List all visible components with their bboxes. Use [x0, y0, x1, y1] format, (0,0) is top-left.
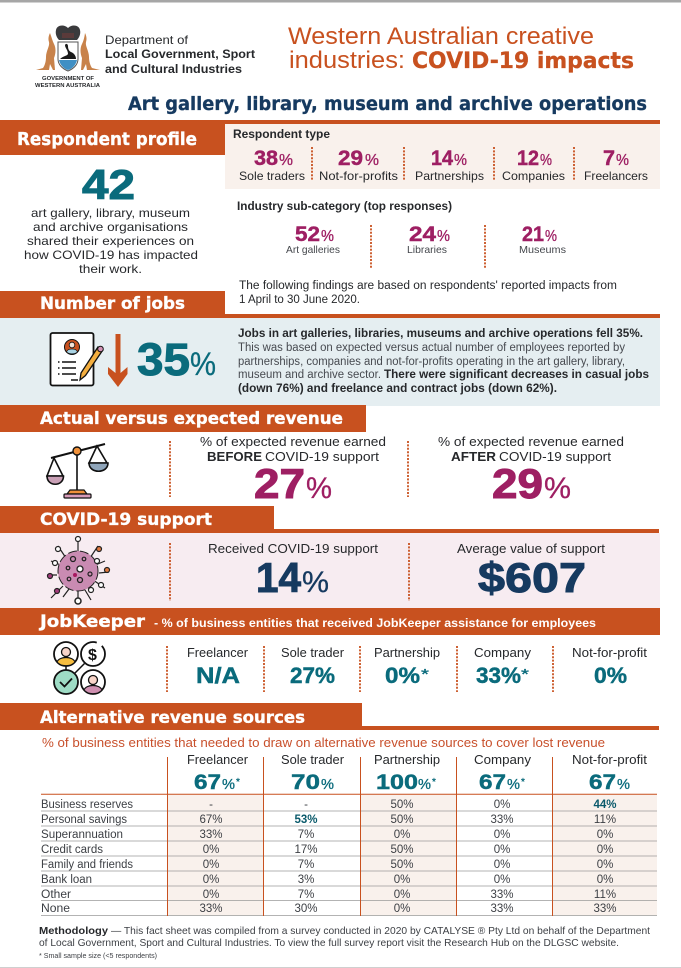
panel: JobKeeper percentages: Partnership — [374, 645, 440, 660]
department name: Local Government, Sport — [105, 47, 255, 61]
title: COVID-19 impacts — [412, 49, 634, 74]
row: other: 0% — [203, 889, 219, 901]
row: business reserves: Business reserves — [41, 799, 133, 811]
panel: revenue before support: 27 — [254, 460, 305, 507]
row: personal savings: 11% — [594, 814, 616, 826]
text block: jobs summary: This was based on expected versus actual number of employees reported by — [238, 342, 625, 354]
panel: revenue before support: COVID-19 support — [265, 449, 379, 464]
row: personal savings: Personal savings — [41, 814, 127, 826]
panel: JobKeeper percentages: Company — [474, 645, 532, 660]
row: family and friends: 7% — [298, 859, 314, 871]
statistic: average value — [409, 541, 605, 601]
table header: % — [321, 776, 334, 793]
panel: respondent type: 29 — [338, 147, 363, 170]
row: none — [41, 903, 617, 915]
table header — [187, 752, 647, 794]
statistic: received support: 14 — [256, 554, 302, 601]
row: none: 33% — [593, 903, 617, 915]
table: alternative revenue sources — [41, 752, 657, 916]
table caption: % of business entities that needed to draw on alternative revenue sources to cover lost revenue — [42, 735, 605, 750]
heading: JobKeeper — [0, 608, 660, 635]
panel: JobKeeper percentages: 0% — [594, 663, 627, 688]
heading: actual versus expected revenue — [0, 405, 366, 432]
table header: % — [507, 776, 520, 793]
panel: revenue before support: BEFORE — [207, 449, 262, 464]
callout: 42 organisations: shared their experiences on — [27, 234, 194, 248]
department name: and Cultural Industries — [105, 62, 242, 76]
table header: 70 — [291, 771, 320, 794]
heading: respondent profile: Respondent profile — [17, 129, 197, 150]
panel: revenue after support — [408, 434, 624, 507]
row: other: Other — [41, 889, 71, 901]
row: family and friends — [41, 859, 613, 871]
heading: JobKeeper: - % of business entities that received JobKeeper assistance for employees — [154, 616, 596, 630]
row: credit cards: Credit cards — [41, 844, 103, 856]
table header: * — [432, 777, 436, 788]
row: other — [41, 889, 616, 901]
panel: respondent type: 7 — [603, 147, 615, 170]
row: superannuation: Superannuation — [41, 829, 123, 841]
panel: respondent type: % — [279, 152, 293, 169]
panel: revenue before support — [170, 434, 386, 507]
row: business reserves — [41, 799, 617, 811]
panel: respondent type: % — [616, 152, 629, 169]
table header: 67 — [194, 771, 221, 794]
row: superannuation: 0% — [494, 829, 510, 841]
panel: industry sub-category: % — [437, 228, 450, 245]
row: superannuation: 7% — [298, 829, 314, 841]
table header: 100 — [376, 771, 418, 794]
panel: respondent type: Sole traders — [239, 169, 305, 183]
row: bank loan — [41, 874, 613, 886]
panel: respondent type: Partnerships — [415, 169, 484, 183]
panel: respondent type: Not-for-profits — [319, 169, 398, 183]
panel: revenue after support: % — [544, 472, 571, 505]
text block: findings period — [239, 280, 617, 306]
panel: industry sub-category: % — [545, 228, 557, 245]
table header: % — [617, 776, 630, 793]
row: bank loan: 0% — [597, 874, 613, 886]
methodology note: Methodology — [39, 925, 108, 937]
logo: Government of Western Australia crest: WESTERN AUSTRALIA — [35, 83, 100, 89]
panel: industry sub-category: 52 — [295, 223, 320, 246]
text block: findings period: The following findings are based on respondents' reported impacts from — [239, 280, 617, 292]
callout: 42 organisations: art gallery, library, museum — [31, 206, 190, 220]
row: personal savings: 67% — [199, 814, 223, 826]
row: none: 30% — [294, 903, 318, 915]
statistic: received support — [170, 541, 378, 601]
statistic: 35%: % — [190, 346, 216, 382]
row: superannuation — [41, 829, 613, 841]
row: bank loan: 0% — [494, 874, 510, 886]
row: bank loan: 0% — [203, 874, 219, 886]
row: bank loan: 0% — [394, 874, 410, 886]
statistic: average value: Average value of support — [457, 541, 605, 556]
row: personal savings: 53% — [294, 814, 318, 826]
row: family and friends: 50% — [390, 859, 414, 871]
panel: JobKeeper percentages: Sole trader — [281, 645, 345, 660]
row: personal savings: 33% — [490, 814, 514, 826]
callout: 42 organisations: how COVID-19 has impacted — [24, 248, 198, 262]
callout: 42 organisations: and archive organisations — [33, 220, 188, 234]
heading: alternative revenue sources — [0, 703, 659, 730]
heading: respondent profile — [0, 120, 660, 155]
panel: industry sub-category: Museums — [519, 244, 566, 256]
table header: Partnership — [374, 752, 440, 767]
text block: jobs summary: Jobs in art galleries, libraries, museums and archive operations fell 35%. — [238, 328, 643, 340]
heading: number of jobs — [0, 291, 660, 318]
table header: Freelancer — [187, 752, 249, 767]
panel: JobKeeper percentages: Not-for-profit — [572, 645, 647, 660]
icon: down arrow — [108, 334, 128, 387]
department name — [105, 33, 255, 76]
row: business reserves: 0% — [494, 799, 510, 811]
icon: document and pencil — [50, 333, 103, 386]
panel: JobKeeper percentages: 0% — [385, 663, 420, 688]
row: bank loan: 3% — [298, 874, 314, 886]
methodology note: of Local Government, Sport and Cultural Industries. To view the full survey report visit the Research Hub on the DLGSC website. — [39, 937, 619, 949]
logo: Government of Western Australia crest — [35, 26, 100, 89]
methodology note: — This fact sheet was compiled from a survey conducted in 2020 by CATALYSE ® Pty Ltd on behalf of the Department — [111, 925, 650, 937]
panel: JobKeeper percentages: 33% — [476, 663, 521, 688]
icon: people and money network — [54, 642, 105, 694]
panel: respondent type: % — [365, 152, 379, 169]
table header: Sole trader — [281, 752, 345, 767]
callout: 42 organisations — [24, 161, 198, 276]
table header: % — [418, 776, 431, 793]
statistic: 35%: 35 — [137, 334, 190, 385]
row: personal savings — [41, 814, 616, 826]
row: business reserves: - — [304, 799, 308, 811]
row: other: 11% — [594, 889, 616, 901]
icon: virus — [47, 536, 110, 604]
text block: jobs summary: museum and archive sector. — [238, 369, 381, 381]
statistic: 35% — [137, 334, 216, 385]
panel: number of jobs — [0, 318, 660, 406]
panel: respondent type: Respondent type — [233, 129, 330, 141]
statistic: received support: % — [302, 566, 329, 599]
row: credit cards — [41, 844, 613, 856]
row: family and friends: 0% — [203, 859, 219, 871]
title: Western Australian creative — [288, 23, 594, 50]
table header: Company — [474, 752, 532, 767]
text block: jobs summary: partnerships, companies and not-for-profits operating in the art gallery, library, — [238, 356, 625, 368]
panel: JobKeeper percentages: * — [521, 666, 529, 683]
callout: 42 organisations: their work. — [79, 262, 142, 276]
panel: respondent type: % — [540, 152, 552, 169]
row: credit cards: 50% — [390, 844, 414, 856]
row: none: 0% — [394, 903, 410, 915]
panel: respondent type — [225, 124, 660, 189]
heading: actual versus expected revenue: Actual versus expected revenue — [40, 409, 343, 429]
row: other: 7% — [298, 889, 314, 901]
row: bank loan: Bank loan — [41, 874, 92, 886]
panel: JobKeeper percentages: N/A — [196, 663, 240, 688]
row: superannuation: 33% — [199, 829, 223, 841]
title: industries: — [289, 47, 405, 74]
panel: JobKeeper percentages — [167, 645, 647, 692]
row: family and friends: 0% — [494, 859, 510, 871]
panel: industry sub-category: Industry sub-category (top responses) — [237, 201, 452, 213]
panel: industry sub-category: % — [321, 228, 334, 245]
row: none: 33% — [199, 903, 223, 915]
panel: respondent type: Companies — [502, 169, 565, 183]
icon: scales — [47, 444, 108, 498]
panel: industry sub-category: 21 — [522, 223, 544, 246]
icon: people and money network: $ — [88, 647, 97, 664]
panel: revenue before support: % — [306, 472, 332, 505]
department name: Department of — [105, 33, 189, 47]
table header: Not-for-profit — [572, 752, 647, 767]
panel: respondent type: Freelancers — [584, 169, 648, 183]
heading: number of jobs: Number of jobs — [40, 294, 185, 314]
row: credit cards: 17% — [294, 844, 318, 856]
table header: * — [236, 777, 240, 788]
row: business reserves: 50% — [390, 799, 414, 811]
heading: alternative revenue sources: Alternative revenue sources — [40, 708, 305, 728]
text block: findings period: 1 April to 30 June 2020. — [239, 294, 360, 306]
row: credit cards: 0% — [494, 844, 510, 856]
row: superannuation: 0% — [597, 829, 613, 841]
panel: industry sub-category: Art galleries — [286, 244, 340, 256]
row: business reserves: 44% — [593, 799, 617, 811]
row: family and friends: Family and friends — [41, 859, 133, 871]
statistic: average value: $607 — [478, 554, 586, 601]
table header: % — [222, 776, 235, 793]
table header: 67 — [479, 771, 506, 794]
text block: jobs summary — [238, 328, 649, 395]
row: other: 0% — [394, 889, 410, 901]
panel: JobKeeper percentages: Freelancer — [187, 645, 249, 660]
heading: COVID-19 support — [0, 506, 659, 533]
statistic: received support: Received COVID-19 support — [208, 541, 378, 556]
panel: industry sub-category: 24 — [409, 223, 436, 246]
logo: Government of Western Australia crest: GOVERNMENT OF — [42, 76, 95, 82]
text block: jobs summary: (down 76%) and freelance and contract jobs (down 62%). — [238, 383, 557, 395]
panel: respondent type: 12 — [517, 147, 539, 170]
panel: revenue after support: COVID-19 support — [499, 449, 611, 464]
panel: respondent type: % — [454, 152, 467, 169]
panel: industry sub-category — [237, 201, 566, 268]
heading: COVID-19 support: COVID-19 support — [40, 510, 212, 530]
row: business reserves: - — [209, 799, 213, 811]
callout: 42 organisations: 42 — [82, 161, 135, 208]
panel: revenue after support: 29 — [492, 460, 543, 507]
row: personal savings: 50% — [390, 814, 414, 826]
row: credit cards: 0% — [203, 844, 219, 856]
methodology note — [39, 925, 650, 960]
methodology note: * Small sample size (<5 respondents) — [39, 951, 157, 960]
panel: JobKeeper percentages: 27% — [290, 663, 335, 688]
table header: 67 — [589, 771, 616, 794]
table header: * — [521, 777, 525, 788]
panel: revenue after support: AFTER — [451, 449, 497, 464]
panel: respondent type: 14 — [431, 147, 453, 170]
row: none: None — [41, 903, 70, 915]
panel: respondent type: 38 — [254, 147, 278, 170]
panel: revenue after support: % of expected revenue earned — [438, 434, 624, 449]
panel: industry sub-category: Libraries — [407, 244, 447, 256]
text block: jobs summary: There were significant decreases in casual jobs — [384, 369, 649, 381]
subtitle: Art gallery, library, museum and archive operations — [128, 93, 647, 115]
row: superannuation: 0% — [394, 829, 410, 841]
heading: JobKeeper: JobKeeper — [39, 612, 146, 632]
row: credit cards: 0% — [597, 844, 613, 856]
panel: revenue before support: % of expected revenue earned — [200, 434, 386, 449]
panel: COVID-19 support — [0, 533, 660, 608]
panel: JobKeeper percentages: * — [421, 666, 429, 683]
row: other: 33% — [490, 889, 514, 901]
row: family and friends: 0% — [597, 859, 613, 871]
title — [288, 23, 634, 74]
row: none: 33% — [490, 903, 514, 915]
